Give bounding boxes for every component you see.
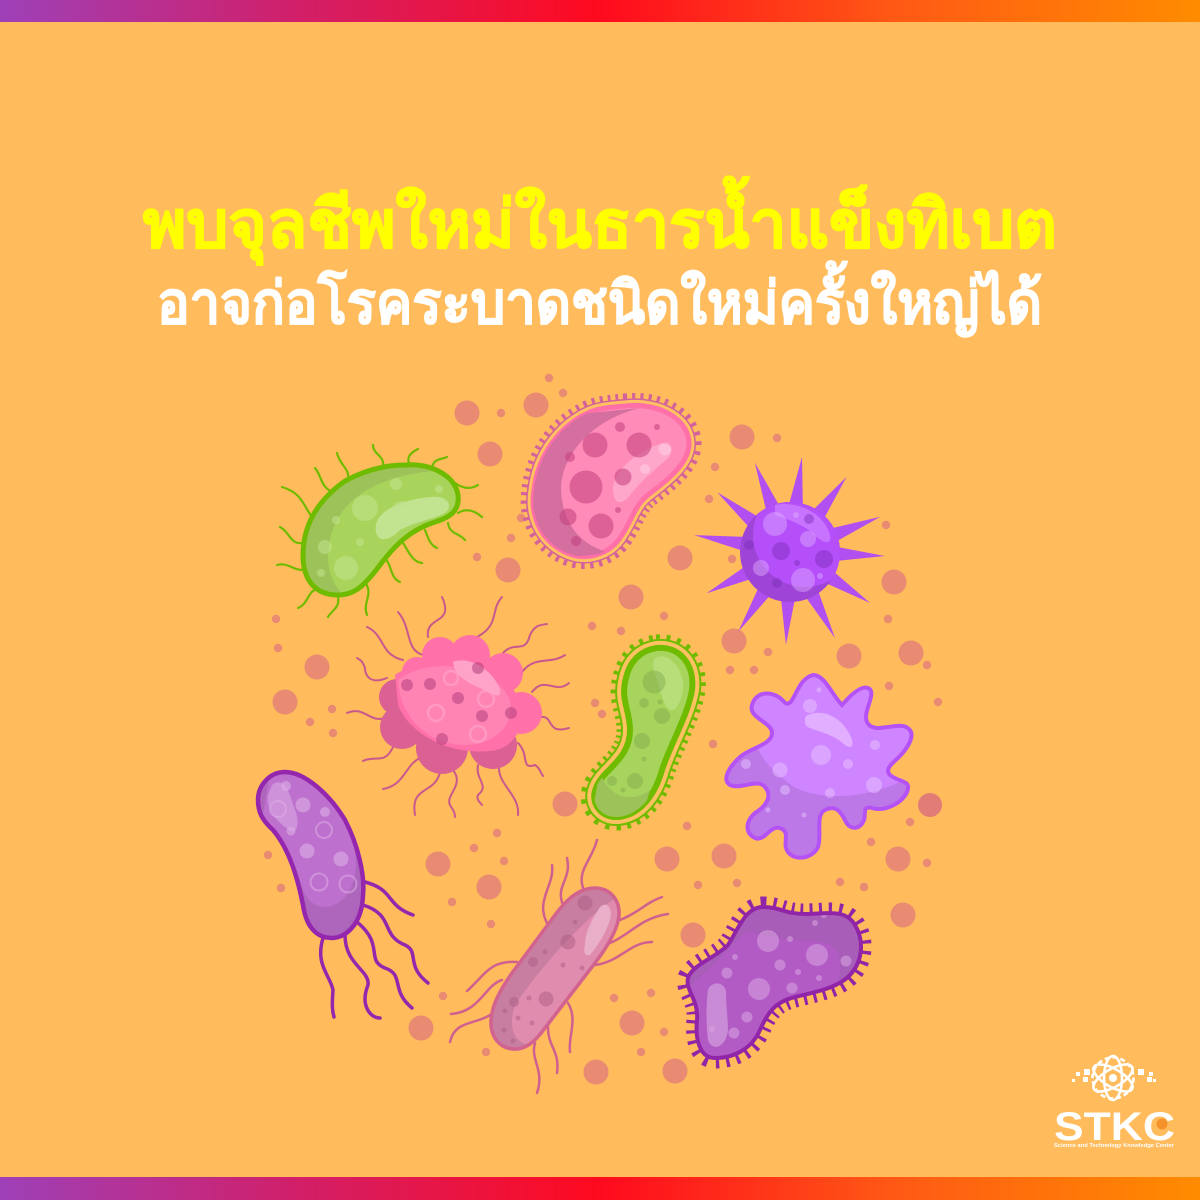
microbe: violet amoeba (726, 670, 920, 858)
title line 2: อาจก่อโรคระบาดชนิดใหม่ครั้งใหญ่ได้ (157, 261, 1042, 337)
icon: atom emblem (1072, 1056, 1156, 1100)
logo: STKC (1054, 1056, 1175, 1149)
top gradient bar (0, 0, 1200, 22)
microbe: purple bumpy cell (688, 907, 861, 1060)
background spore dots (264, 374, 942, 1084)
wordmark: STKC (1054, 1105, 1175, 1149)
tagline: Science and Technology Knowledge Center (1054, 1143, 1175, 1149)
microbe: pink bean-shaped cell (525, 405, 689, 560)
microbe: green peanut-shaped cell (590, 648, 692, 825)
icon: orange dot (1156, 1118, 1168, 1130)
microbe: green curved bacterium (277, 445, 482, 617)
title (143, 175, 1057, 337)
title line 1: พบจุลชีพใหม่ในธารน้ำแข็งทิเบต (143, 175, 1057, 266)
microbe: pink flagellated rod (450, 840, 668, 1093)
microbe: pink clustered blob (347, 597, 569, 817)
microbe: purple flagellated rod (258, 772, 428, 1018)
microbe: purple spiked virus (693, 456, 885, 645)
bottom gradient bar (0, 1177, 1200, 1200)
